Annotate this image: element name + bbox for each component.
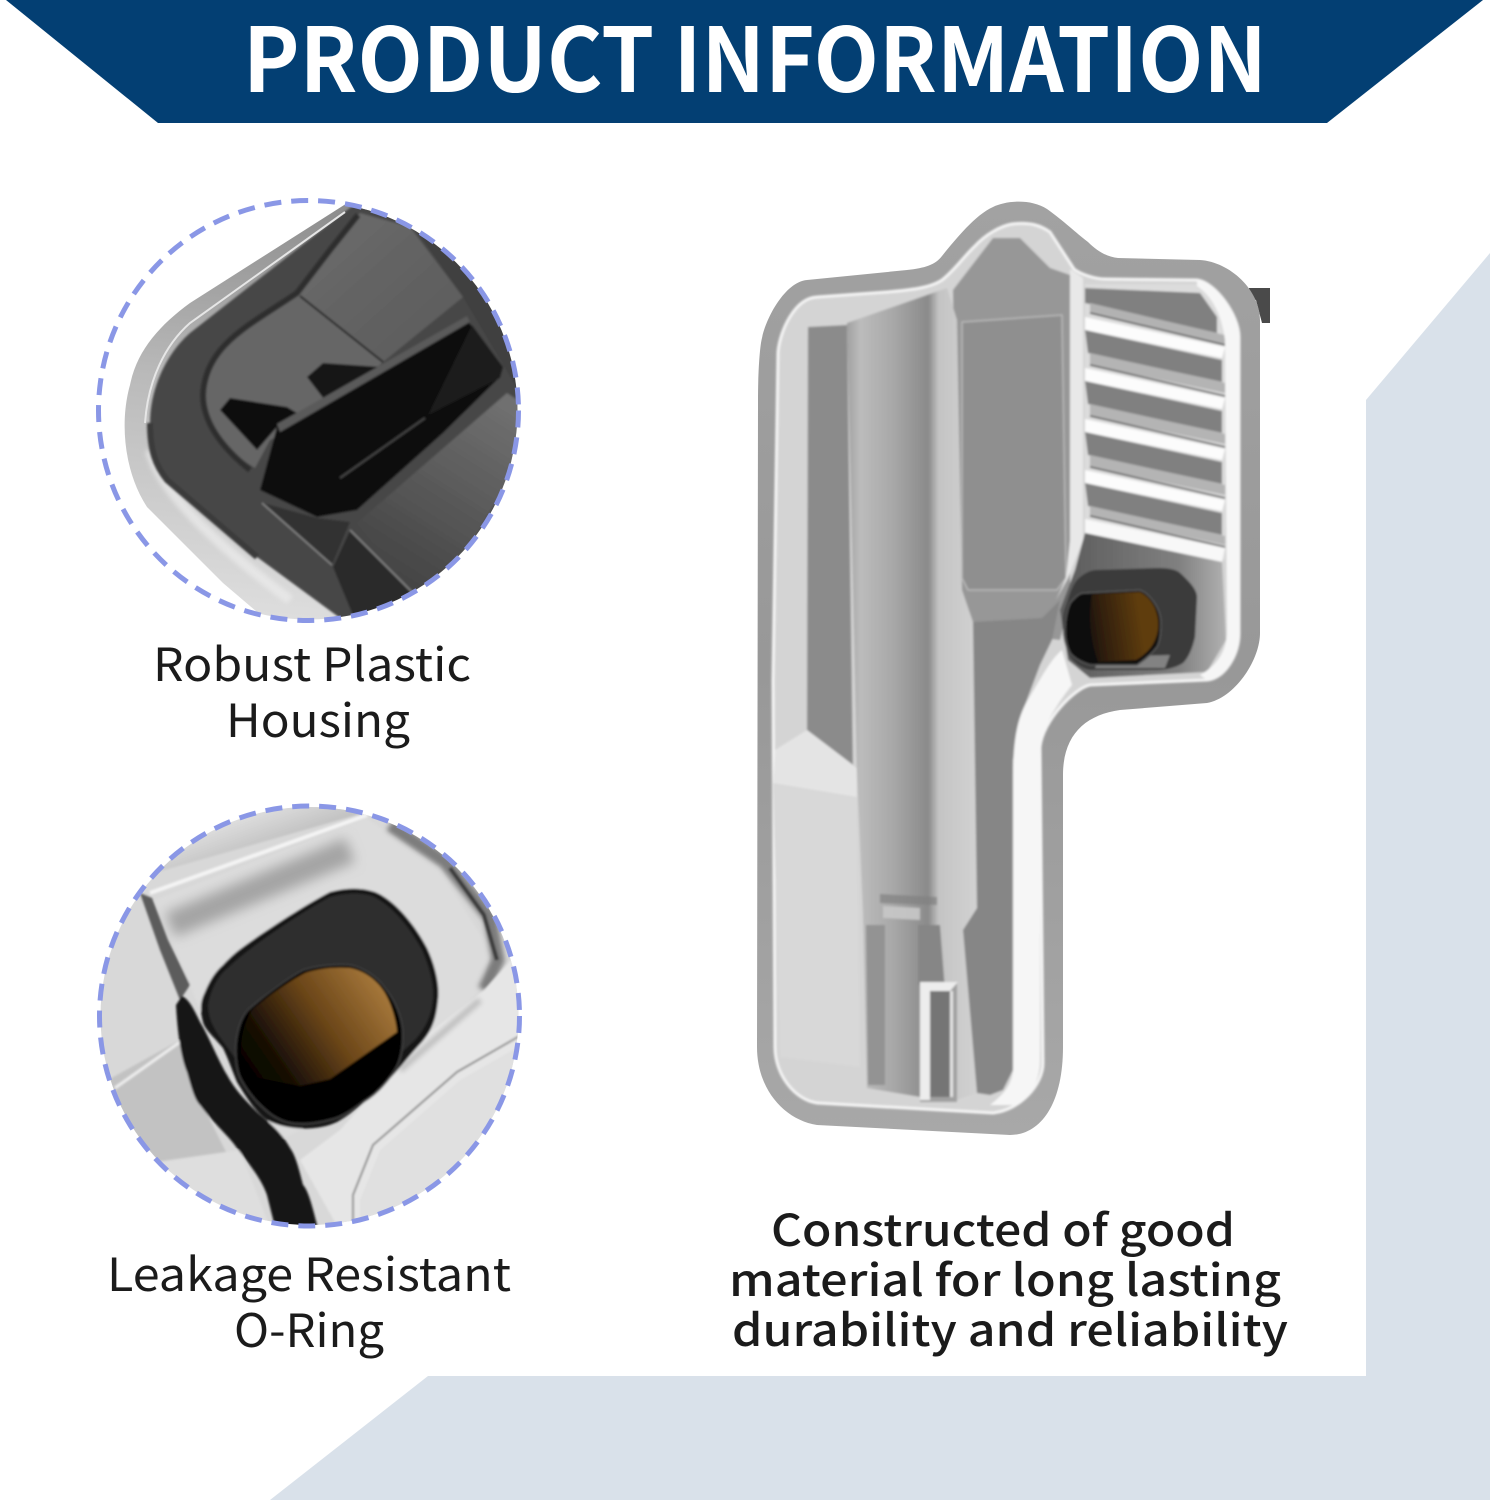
label: robust plastic housing xyxy=(153,629,471,751)
white right edge xyxy=(1197,280,1239,680)
left panels xyxy=(110,1044,226,1162)
white band xyxy=(990,650,1072,1105)
description text: durability and reliability xyxy=(732,1295,1288,1359)
label: leakage resistant o-ring xyxy=(107,1239,511,1361)
port xyxy=(201,889,438,1128)
dashed ring xyxy=(100,806,520,1226)
recessed rectangle xyxy=(962,315,1066,590)
photo: oval port with o-ring xyxy=(100,807,518,1225)
lower left flat panel xyxy=(772,783,776,835)
top band xyxy=(162,807,358,870)
header banner xyxy=(6,0,1483,123)
port xyxy=(1063,568,1197,670)
description text: Constructed of good xyxy=(771,1195,1235,1259)
flange xyxy=(750,195,1270,1140)
dark crease xyxy=(140,893,190,1000)
pan floor xyxy=(773,223,1239,1113)
left dark panel xyxy=(807,325,857,768)
panel: plastic housing close-up xyxy=(96,198,521,623)
panel: o-ring close-up xyxy=(97,804,522,1228)
ribs xyxy=(1085,313,1225,562)
central tube xyxy=(847,288,977,1102)
photo: black plastic housing xyxy=(124,204,518,620)
description text: material for long lasting xyxy=(729,1245,1281,1309)
area below ribs xyxy=(1060,533,1226,678)
rib background xyxy=(1085,284,1225,560)
small rectangular tab xyxy=(920,982,957,1102)
background: lower right accent shape xyxy=(270,253,1490,1500)
clip tab xyxy=(1249,288,1270,323)
label: robust plastic housing: Robust Plastic xyxy=(153,629,471,695)
lower right bands xyxy=(301,961,518,1222)
label: leakage resistant o-ring: Leakage Resistant xyxy=(107,1239,511,1305)
dashed ring xyxy=(98,200,518,620)
description text xyxy=(729,1195,1288,1359)
right dark panel xyxy=(963,600,1060,1095)
label: robust plastic housing: Housing xyxy=(226,685,410,751)
white strip left of ribs xyxy=(1056,269,1083,600)
product photo: metal filter pan xyxy=(750,195,1270,1140)
upper centre peak xyxy=(953,238,1070,640)
label: leakage resistant o-ring: O-Ring xyxy=(234,1295,384,1361)
